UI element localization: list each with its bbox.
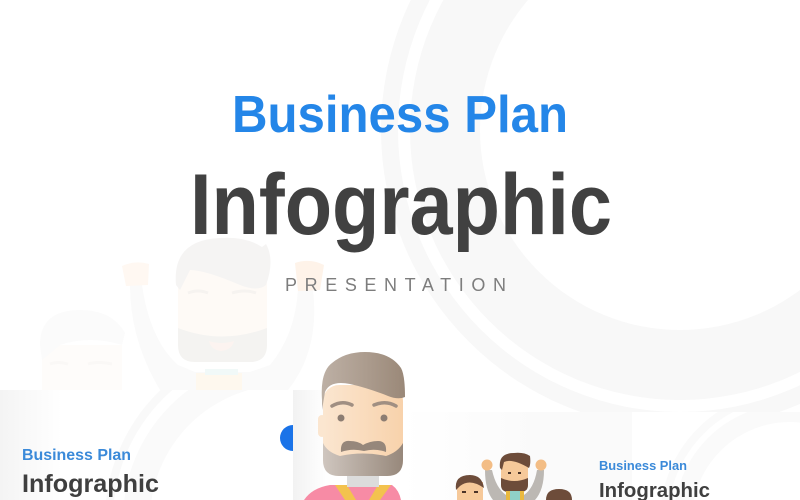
title: Infographic: Infographic	[190, 157, 612, 253]
faded background characters	[40, 238, 324, 390]
right thumbnail subtitle: Business Plan	[599, 458, 687, 473]
lanyard collar	[335, 485, 391, 500]
faded man left	[50, 361, 112, 366]
person centre	[482, 453, 546, 500]
infographic cover	[0, 94, 710, 500]
group of business people	[456, 453, 572, 500]
panel: centre thumbnail	[293, 352, 405, 500]
tagline: Presentation: PRESENTATION	[285, 275, 506, 295]
panel: right thumbnail	[456, 452, 710, 500]
brows and eyes	[332, 403, 396, 406]
neck	[347, 476, 379, 487]
subtitle: Business Plan: Business Plan	[232, 86, 568, 144]
panel: left thumbnail	[0, 390, 293, 500]
hair	[322, 352, 405, 410]
person left	[456, 475, 484, 500]
moustache	[341, 441, 386, 452]
beard	[323, 443, 403, 476]
faded man centre	[122, 238, 324, 390]
blue dot	[280, 425, 293, 451]
shirt	[304, 485, 401, 500]
background rings	[381, 0, 800, 429]
person right	[546, 489, 572, 500]
left thumbnail title: Infographic	[22, 470, 159, 498]
ears	[318, 415, 323, 437]
man with moustache	[304, 352, 405, 500]
face	[323, 385, 403, 476]
left thumbnail subtitle: Business Plan	[22, 447, 131, 464]
